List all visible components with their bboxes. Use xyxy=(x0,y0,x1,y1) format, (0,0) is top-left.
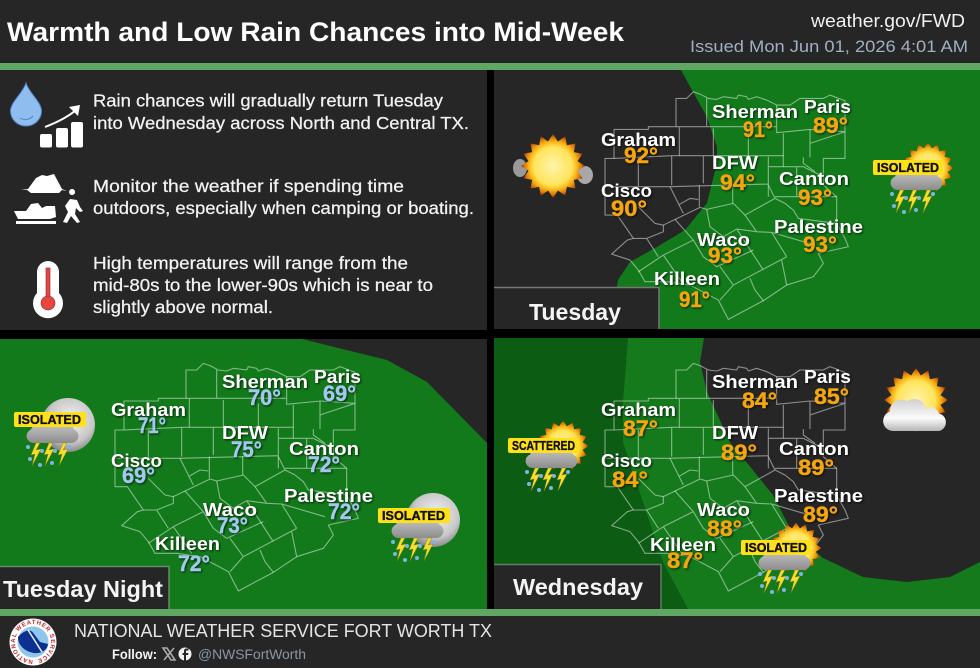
city forecasts: Waco xyxy=(203,499,257,520)
title: Warmth and Low Rain Chances into Mid-Week xyxy=(7,17,624,47)
city forecasts: 94° xyxy=(720,170,755,195)
city forecasts: Palestine xyxy=(774,485,863,506)
city forecasts: Paris xyxy=(804,366,851,387)
icon: isolated storms xyxy=(873,142,954,214)
panel: Tuesday map xyxy=(494,70,980,329)
panel: Tuesday Night map xyxy=(0,339,487,609)
city forecasts: 72° xyxy=(308,452,340,477)
city forecasts: 75° xyxy=(231,437,262,462)
icon: isolated storms xyxy=(741,522,822,594)
city forecasts: 89° xyxy=(721,440,757,465)
icon: rain drop xyxy=(10,83,42,126)
badge: isolated: ISOLATED xyxy=(745,541,807,555)
city forecasts: Cisco xyxy=(601,180,652,201)
city forecasts: Paris xyxy=(314,366,361,387)
day tab: Tuesday: Tuesday xyxy=(529,299,621,325)
city forecasts: 85° xyxy=(814,384,849,409)
city forecasts: 70° xyxy=(248,385,281,410)
footer xyxy=(0,616,980,668)
city forecasts: Palestine xyxy=(774,216,863,237)
city forecasts: 93° xyxy=(708,243,742,268)
follow label: Follow: xyxy=(112,647,157,662)
footer green accent bar xyxy=(0,609,980,616)
city forecasts: 90° xyxy=(611,196,647,221)
city forecasts: Canton xyxy=(779,168,849,189)
city forecasts: Sherman xyxy=(222,371,308,392)
text: rain chances: into Wednesday across North and Central TX. xyxy=(93,113,469,133)
city forecasts: 72° xyxy=(178,551,210,576)
icon: scattered storms xyxy=(508,420,589,492)
day tab: Tuesday Night xyxy=(0,566,169,609)
social handle: @NWSFortWorth xyxy=(198,647,306,662)
city forecasts xyxy=(601,366,863,573)
city forecasts: Sherman xyxy=(712,101,798,122)
city forecasts: 84° xyxy=(742,388,777,413)
city forecasts: Killeen xyxy=(650,534,716,555)
dry area xyxy=(700,338,980,582)
county map xyxy=(605,363,848,591)
day tab: Tuesday xyxy=(494,287,659,329)
city forecasts: Graham xyxy=(601,129,676,150)
panel: key messages xyxy=(0,70,487,330)
text: monitor weather: outdoors, especially when camping or boating. xyxy=(93,198,474,218)
city forecasts xyxy=(111,366,373,576)
badge: scattered: SCATTERED xyxy=(512,439,575,453)
county map xyxy=(605,92,848,319)
city forecasts: 84° xyxy=(612,467,648,492)
office name: NATIONAL WEATHER SERVICE FORT WORTH TX xyxy=(74,621,492,641)
icon: sun xyxy=(513,134,593,198)
text: monitor weather: Monitor the weather if spending time xyxy=(93,176,404,196)
city forecasts: Sherman xyxy=(712,371,798,392)
icon: thermometer xyxy=(33,261,63,318)
city forecasts: 88° xyxy=(707,516,742,541)
city forecasts: 89° xyxy=(813,113,848,138)
city forecasts: Graham xyxy=(601,399,676,420)
city forecasts: Waco xyxy=(697,499,750,520)
city forecasts: 69° xyxy=(122,463,155,488)
city forecasts: DFW xyxy=(222,422,269,443)
day tab: Wednesday xyxy=(494,564,661,609)
city forecasts: Killeen xyxy=(155,533,220,554)
city forecasts: Killeen xyxy=(654,268,720,289)
city forecasts: Cisco xyxy=(601,450,652,471)
panel: Wednesday map xyxy=(494,338,980,609)
icon: Facebook logo xyxy=(178,648,192,661)
city forecasts: 87° xyxy=(623,416,658,441)
day tab: Tuesday Night: Tuesday Night xyxy=(3,576,163,602)
icon: NWS logo: NATIONAL WEATHER SERVICE xyxy=(10,620,56,664)
city forecasts: Canton xyxy=(779,438,849,459)
issued time: Issued Mon Jun 01, 2026 4:01 AM xyxy=(690,37,968,56)
text: high temperatures: High temperatures will range from the xyxy=(93,253,408,273)
city forecasts xyxy=(601,96,863,312)
city forecasts: 89° xyxy=(803,502,838,527)
badge: isolated: ISOLATED xyxy=(382,509,445,523)
city forecasts: Paris xyxy=(804,96,851,117)
badge: isolated: ISOLATED xyxy=(18,413,81,427)
city forecasts: 73° xyxy=(217,513,248,538)
icon: isolated storms at night, east xyxy=(378,493,460,562)
city forecasts: 71° xyxy=(138,413,166,438)
text: monitor weather xyxy=(93,176,474,218)
header bar xyxy=(0,0,980,63)
city forecasts: 93° xyxy=(798,185,832,210)
city forecasts: 93° xyxy=(803,232,837,257)
city forecasts: Graham xyxy=(111,399,186,420)
icon: tent xyxy=(21,174,67,193)
city forecasts: DFW xyxy=(712,152,759,173)
city forecasts: 69° xyxy=(323,381,356,406)
city forecasts: Palestine xyxy=(284,485,373,506)
city forecasts: Cisco xyxy=(111,450,162,471)
county map xyxy=(115,363,358,591)
icon: X logo xyxy=(163,648,175,660)
city forecasts: 89° xyxy=(798,455,834,480)
badge: isolated: ISOLATED xyxy=(877,161,939,175)
text: high temperatures xyxy=(93,253,433,317)
icon: hiker xyxy=(63,189,83,223)
icon: partly cloudy xyxy=(883,368,948,432)
isolated rain area xyxy=(623,338,980,609)
icon: rising bar chart xyxy=(40,105,83,148)
text: high temperatures: mid-80s to the lower-90s which is near to xyxy=(93,275,433,295)
city forecasts: 91° xyxy=(679,287,710,312)
city forecasts: Canton xyxy=(289,438,359,459)
city forecasts: 87° xyxy=(667,548,703,573)
city forecasts: DFW xyxy=(712,422,759,443)
website: weather.gov/FWD xyxy=(810,10,965,31)
city forecasts: 92° xyxy=(624,143,658,168)
dry area xyxy=(302,339,487,443)
text: rain chances: Rain chances will gradually return Tuesday xyxy=(93,90,443,110)
city forecasts: Waco xyxy=(697,229,750,250)
icon: boat xyxy=(14,203,56,224)
rain chance area xyxy=(617,70,980,329)
header green accent bar xyxy=(0,63,980,70)
text: high temperatures: slightly above normal. xyxy=(93,297,273,317)
text: rain chances xyxy=(93,90,469,133)
icon: isolated storms at night, west xyxy=(14,398,95,467)
city forecasts: 72° xyxy=(328,499,360,524)
day tab: Wednesday: Wednesday xyxy=(513,574,643,600)
city forecasts: 91° xyxy=(743,117,773,142)
